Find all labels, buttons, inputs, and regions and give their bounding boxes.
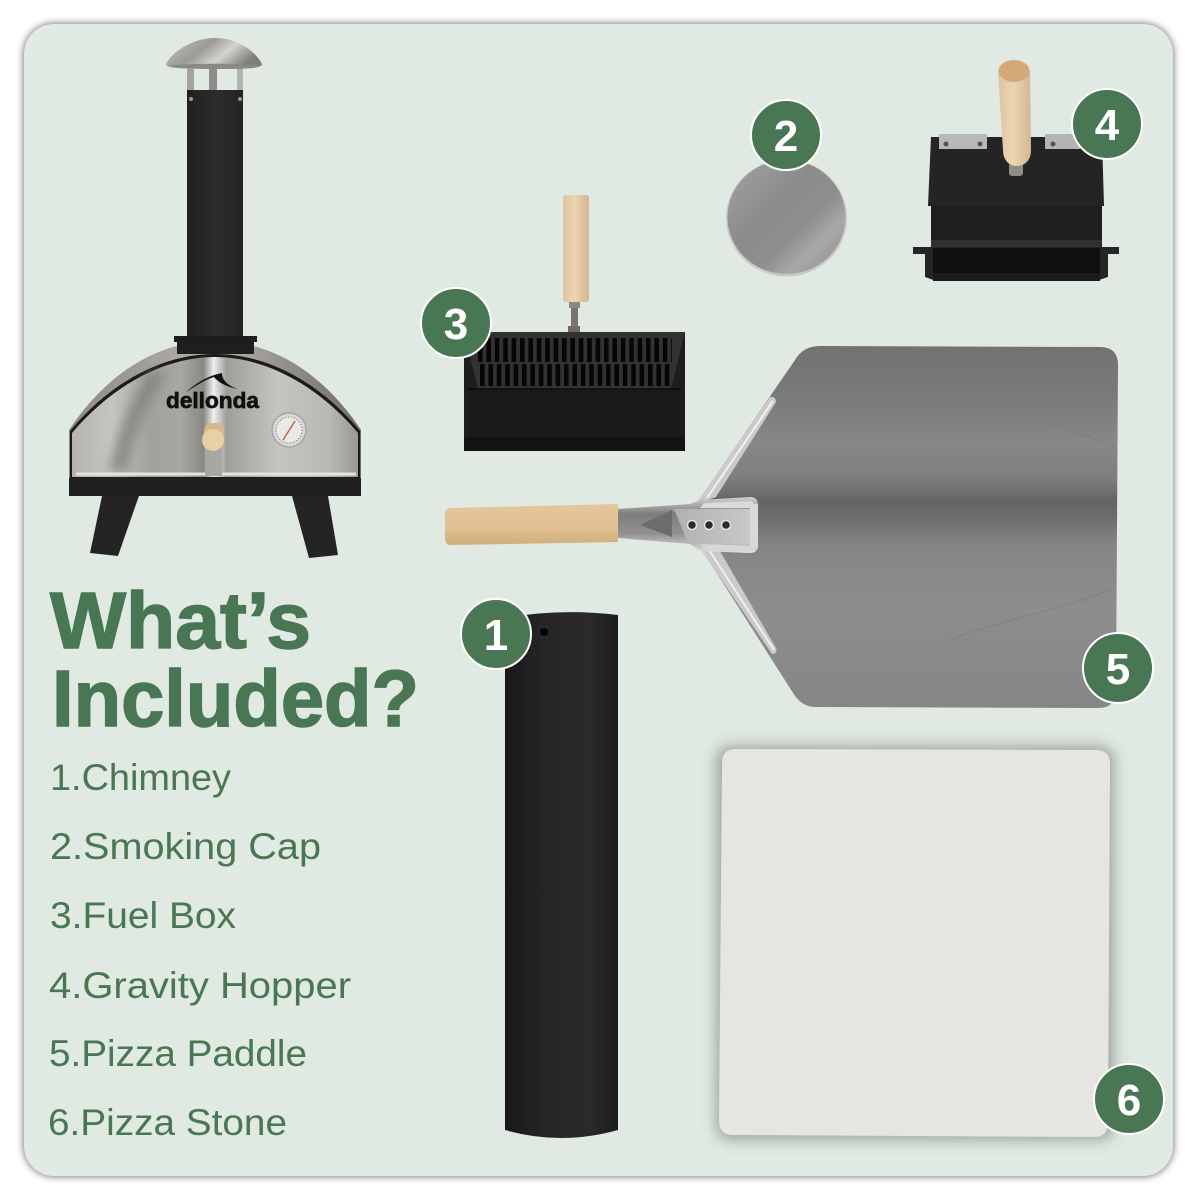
- heading: What's Included?: Included?: [52, 654, 419, 743]
- badge 6: 6: [1117, 1076, 1141, 1125]
- badge 2: 2: [774, 112, 798, 161]
- fuel box body: [464, 332, 685, 451]
- list item 1: 1.Chimney: [50, 757, 232, 798]
- item: chimney tube: [505, 612, 618, 1138]
- oven base: [69, 478, 361, 496]
- paddle wooden handle: [445, 504, 618, 545]
- item: smoking cap disc: [726, 160, 847, 276]
- door handle: [202, 423, 224, 476]
- item: gravity hopper: [913, 60, 1119, 281]
- oven dome and door: [69, 341, 361, 480]
- item: fuel box: [464, 195, 685, 451]
- badge 5: 5: [1106, 645, 1130, 694]
- oven chimney flue: [187, 90, 243, 336]
- badge 1: 1: [484, 611, 508, 660]
- item: pizza paddle: [445, 346, 1118, 708]
- list item 5: 5.Pizza Paddle: [49, 1033, 307, 1074]
- fuel box handle: [563, 195, 589, 332]
- paddle blade: [697, 346, 1118, 708]
- item: pizza stone: [716, 746, 1114, 1140]
- badge 4: [1072, 89, 1142, 159]
- hopper body: [913, 137, 1119, 281]
- collar: [174, 336, 257, 354]
- list item 3: 3.Fuel Box: [50, 895, 237, 936]
- paddle support arms: [696, 397, 776, 654]
- assembled pizza oven: [69, 38, 361, 558]
- smoking cap on oven: [166, 38, 262, 90]
- dellonda logo: dellonda: [166, 388, 260, 413]
- badge 1: [461, 599, 531, 669]
- heading: What's Included?: What’s: [50, 576, 311, 665]
- item list: [48, 757, 351, 1143]
- oven legs: [90, 496, 338, 558]
- badge 2: [751, 100, 821, 170]
- list item 2: 2.Smoking Cap: [50, 826, 321, 867]
- dellonda logo: [166, 373, 260, 413]
- list item 4: 4.Gravity Hopper: [49, 965, 351, 1006]
- badge 3: [421, 288, 491, 358]
- badge 3: 3: [444, 300, 468, 349]
- badge 4: 4: [1095, 101, 1120, 150]
- badge 5: [1083, 633, 1153, 703]
- hopper handle: [998, 60, 1031, 176]
- badge 6: [1094, 1064, 1164, 1134]
- heading: What's Included?: [50, 576, 419, 743]
- list item 6: 6.Pizza Stone: [48, 1102, 287, 1143]
- hopper hinges: [939, 134, 1080, 149]
- paddle bracket: [618, 497, 758, 553]
- thermometer gauge: [272, 413, 306, 447]
